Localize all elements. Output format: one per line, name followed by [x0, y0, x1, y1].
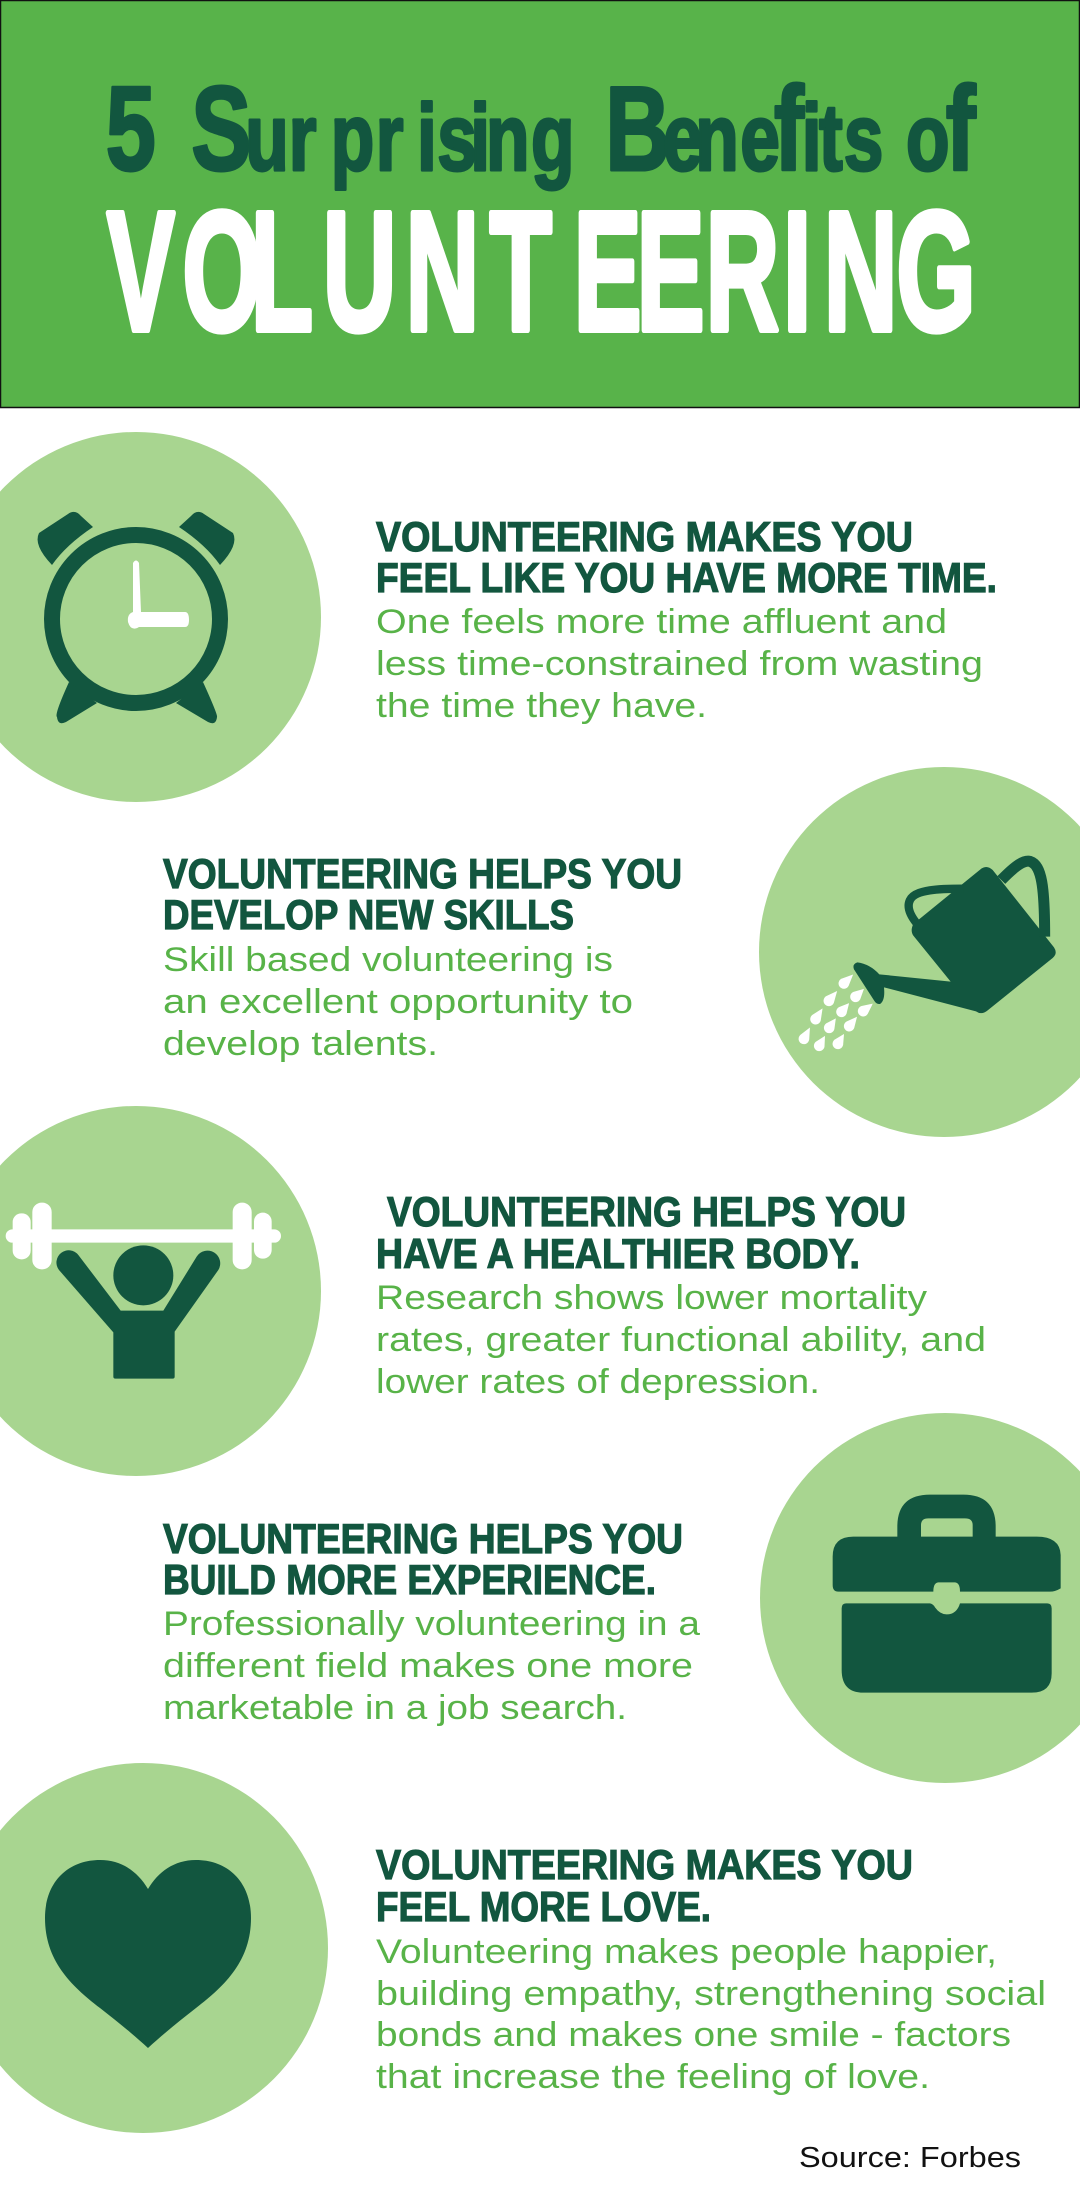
panel: healthier body — [0, 1106, 986, 1476]
circle background — [760, 1413, 1080, 1783]
heading: VOLUNTEERING HELPS YOU — [163, 1515, 683, 1562]
body text: less time-constrained from wasting — [376, 645, 983, 683]
body text: building empathy, strengthening social — [376, 1975, 1046, 2013]
body text: rates, greater functional ability, and — [376, 1321, 986, 1359]
barbell — [6, 1203, 281, 1269]
body text — [163, 941, 633, 1063]
icon: alarm clock — [38, 512, 234, 723]
body text: bonds and makes one smile - factors — [376, 2016, 1011, 2054]
title line two: VOLUNTEERING — [107, 176, 976, 366]
heading: VOLUNTEERING HELPS YOU — [387, 1188, 906, 1235]
person — [56, 1245, 220, 1379]
panel: new skills — [163, 767, 1080, 1137]
heading second line: FEEL MORE LOVE. — [376, 1883, 711, 1930]
body text: Professionally volunteering in a — [163, 1605, 700, 1643]
panel: more love — [0, 1763, 1046, 2133]
title banner — [0, 0, 1080, 408]
heading second line: BUILD MORE EXPERIENCE. — [163, 1556, 656, 1603]
icon: watering can — [797, 861, 1056, 1053]
body text: Volunteering makes people happier, — [376, 1933, 997, 1971]
heading: VOLUNTEERING MAKES YOU — [376, 513, 913, 560]
heading: VOLUNTEERING MAKES YOU — [376, 1841, 913, 1888]
body text — [376, 1933, 1046, 2096]
body text: develop talents. — [163, 1025, 438, 1063]
heading second line: DEVELOP NEW SKILLS — [163, 891, 574, 938]
body text: different field makes one more — [163, 1647, 693, 1685]
circle background — [0, 432, 321, 802]
body text: Research shows lower mortality — [376, 1279, 927, 1317]
icon: weightlifter — [6, 1203, 281, 1379]
water drops — [797, 971, 876, 1053]
circle background — [759, 767, 1080, 1137]
body text: marketable in a job search. — [163, 1689, 627, 1727]
body text — [376, 1279, 986, 1401]
body text: the time they have. — [376, 687, 707, 725]
heading: VOLUNTEERING HELPS YOU — [163, 850, 682, 897]
icon: heart — [45, 1860, 251, 2048]
heading second line: FEEL LIKE YOU HAVE MORE TIME. — [376, 554, 997, 601]
icon: briefcase — [833, 1495, 1061, 1693]
body text: lower rates of depression. — [376, 1363, 820, 1401]
circle background — [0, 1106, 321, 1476]
body text: Skill based volunteering is — [163, 941, 613, 979]
title line one: 5 Surprising Benefits of — [106, 63, 976, 196]
panel: more experience — [163, 1413, 1080, 1783]
source note: Source: Forbes — [799, 2142, 1021, 2174]
body text — [376, 603, 983, 725]
body text: an excellent opportunity to — [163, 983, 633, 1021]
heading second line: HAVE A HEALTHIER BODY. — [376, 1230, 860, 1277]
body text — [163, 1605, 700, 1727]
banner background — [0, 0, 1080, 408]
body text: One feels more time affluent and — [376, 603, 947, 641]
circle background — [0, 1763, 328, 2133]
panel: more time — [0, 432, 997, 802]
body text: that increase the feeling of love. — [376, 2058, 930, 2096]
